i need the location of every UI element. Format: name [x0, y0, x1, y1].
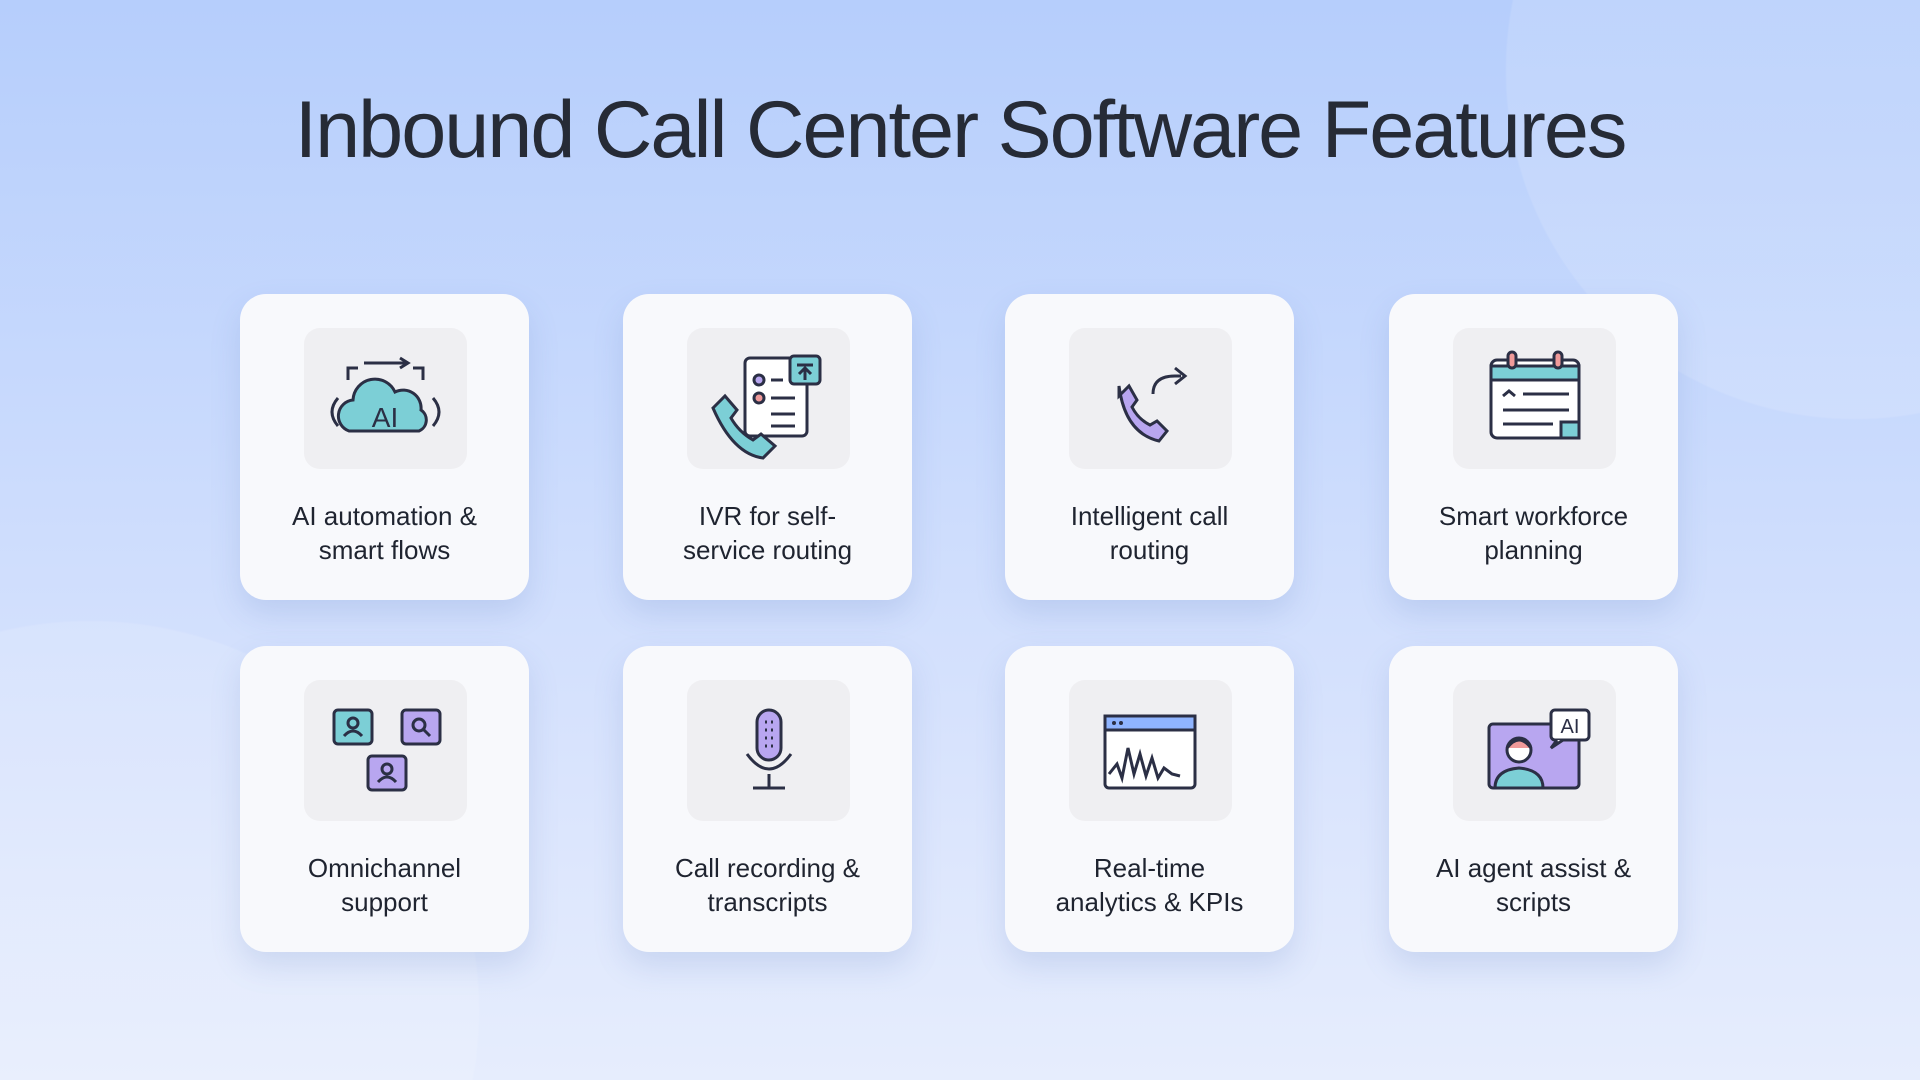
card: workforce	[1389, 294, 1678, 600]
label	[683, 501, 852, 565]
label: Call recording &	[675, 853, 860, 883]
label: analytics & KPIs	[1056, 887, 1243, 917]
card: recording	[623, 646, 912, 952]
card: IVR	[623, 294, 912, 600]
label: Intelligent call	[1071, 501, 1228, 531]
label: smart flows	[319, 535, 450, 565]
label	[1056, 853, 1243, 917]
icon: agent with AI bubble	[1453, 680, 1616, 821]
label	[1071, 501, 1228, 565]
label	[1436, 853, 1631, 917]
label: routing	[1110, 535, 1189, 565]
card: call routing	[1005, 294, 1294, 600]
label: AI automation &	[292, 501, 477, 531]
label: IVR for self-	[699, 501, 836, 531]
icon: IVR phone	[687, 328, 850, 469]
card: analytics	[1005, 646, 1294, 952]
label	[292, 501, 477, 565]
icon: AI cloud	[304, 328, 467, 469]
label: AI agent assist &	[1436, 853, 1631, 883]
label: Real-time	[1094, 853, 1205, 883]
label	[1439, 501, 1628, 565]
icon: omnichannel squares	[304, 680, 467, 821]
label: Smart workforce	[1439, 501, 1628, 531]
card: agent assist	[1389, 646, 1678, 952]
label: Omnichannel	[308, 853, 461, 883]
label	[308, 853, 461, 917]
icon: analytics window	[1069, 680, 1232, 821]
label: support	[341, 887, 428, 917]
icon: microphone	[687, 680, 850, 821]
icon: calendar	[1453, 328, 1616, 469]
icon: agent with AI bubble: AI	[1561, 716, 1579, 738]
label: planning	[1484, 535, 1583, 565]
label: service routing	[683, 535, 852, 565]
label: scripts	[1496, 887, 1571, 917]
label	[675, 853, 860, 917]
card: omnichannel	[240, 646, 529, 952]
label: transcripts	[708, 887, 827, 917]
title: Inbound Call Center Software Features	[295, 85, 1625, 175]
icon: AI cloud: AI	[372, 402, 398, 433]
icon: phone forward	[1069, 328, 1232, 469]
card: AI automation	[240, 294, 529, 600]
